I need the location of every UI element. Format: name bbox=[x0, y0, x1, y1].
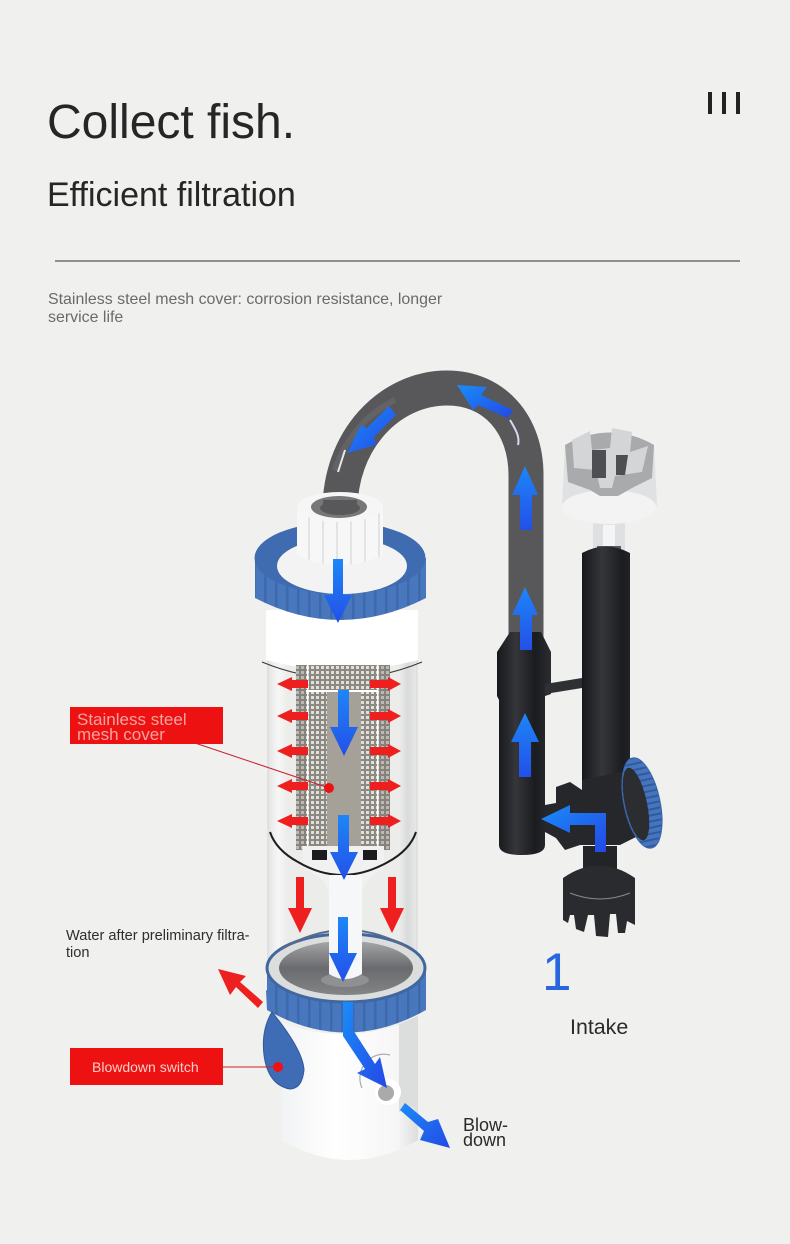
callout: blowdown switch: Blowdown switch bbox=[92, 1059, 199, 1075]
label: filtered water: Water after preliminary filtra- bbox=[66, 928, 250, 944]
bottom strainer bbox=[563, 846, 635, 937]
left riser tube bbox=[497, 632, 551, 855]
subtitle: Efficient filtration bbox=[47, 176, 296, 214]
callout: stainless steel mesh cover: Stainless steel bbox=[77, 710, 187, 729]
arrow: bent towards drain bbox=[343, 1002, 387, 1088]
arrows: radial outflow left bbox=[277, 677, 308, 828]
centre standpipe bbox=[321, 875, 369, 987]
white upper band bbox=[266, 610, 418, 670]
description text: Stainless steel mesh cover: corrosion resistance, longer bbox=[48, 291, 443, 308]
arrow: filtered water out bbox=[218, 969, 263, 1008]
arrows: radial outflow right bbox=[370, 677, 401, 828]
red flow arrows bbox=[218, 677, 404, 1008]
icon: roman numeral three bars bbox=[708, 92, 740, 114]
white base bbox=[281, 1018, 418, 1160]
blue flow arrows bbox=[324, 385, 606, 1148]
mesh seat bbox=[270, 832, 416, 895]
arrow: hose descending bbox=[347, 406, 396, 453]
label: intake: Intake bbox=[570, 1015, 628, 1039]
stainless steel mesh bbox=[296, 665, 390, 850]
label: blow-down: down bbox=[463, 1130, 506, 1150]
arrow: down right bbox=[380, 877, 404, 933]
arrow: blow-down exit bbox=[400, 1103, 450, 1148]
hose bbox=[335, 388, 526, 640]
label: blow-down: Blow- bbox=[463, 1115, 508, 1135]
arrow: hose riser upper bbox=[512, 466, 538, 530]
description text: service life bbox=[48, 309, 123, 326]
blowdown valve knob bbox=[263, 1012, 304, 1089]
clear cylinder bbox=[268, 615, 417, 970]
label: filtered water: tion bbox=[66, 945, 90, 961]
arrow: inside mesh top bbox=[330, 690, 358, 756]
right riser tube bbox=[582, 546, 640, 830]
arrow: down left bbox=[288, 877, 312, 933]
callout: stainless steel mesh cover bbox=[70, 707, 334, 793]
callout: stainless steel mesh cover: mesh cover bbox=[77, 725, 165, 744]
lower elbow bbox=[545, 770, 640, 850]
lower blue ring bbox=[267, 930, 426, 1030]
arrow: hose riser lower bbox=[512, 587, 538, 650]
blue adjuster wheel bbox=[615, 754, 669, 852]
step number: 1 bbox=[542, 943, 571, 1002]
intake unit bbox=[497, 428, 669, 937]
surface skimmer head bbox=[562, 428, 657, 560]
title: Collect fish. bbox=[47, 96, 295, 149]
arrow: hose top bbox=[457, 385, 513, 418]
arrow: elbow inlet bbox=[541, 805, 606, 852]
arrow: into canister bbox=[324, 559, 352, 623]
arrow: inside mesh bottom bbox=[330, 815, 358, 880]
arrow: riser tube bbox=[511, 713, 539, 777]
callout: blowdown switch bbox=[70, 1048, 283, 1085]
drain port bbox=[360, 1054, 401, 1105]
filter canister bbox=[254, 492, 426, 1160]
connecting bar bbox=[545, 678, 582, 694]
upper blue ring and collar bbox=[254, 492, 426, 620]
arrow: standpipe bbox=[329, 917, 357, 982]
